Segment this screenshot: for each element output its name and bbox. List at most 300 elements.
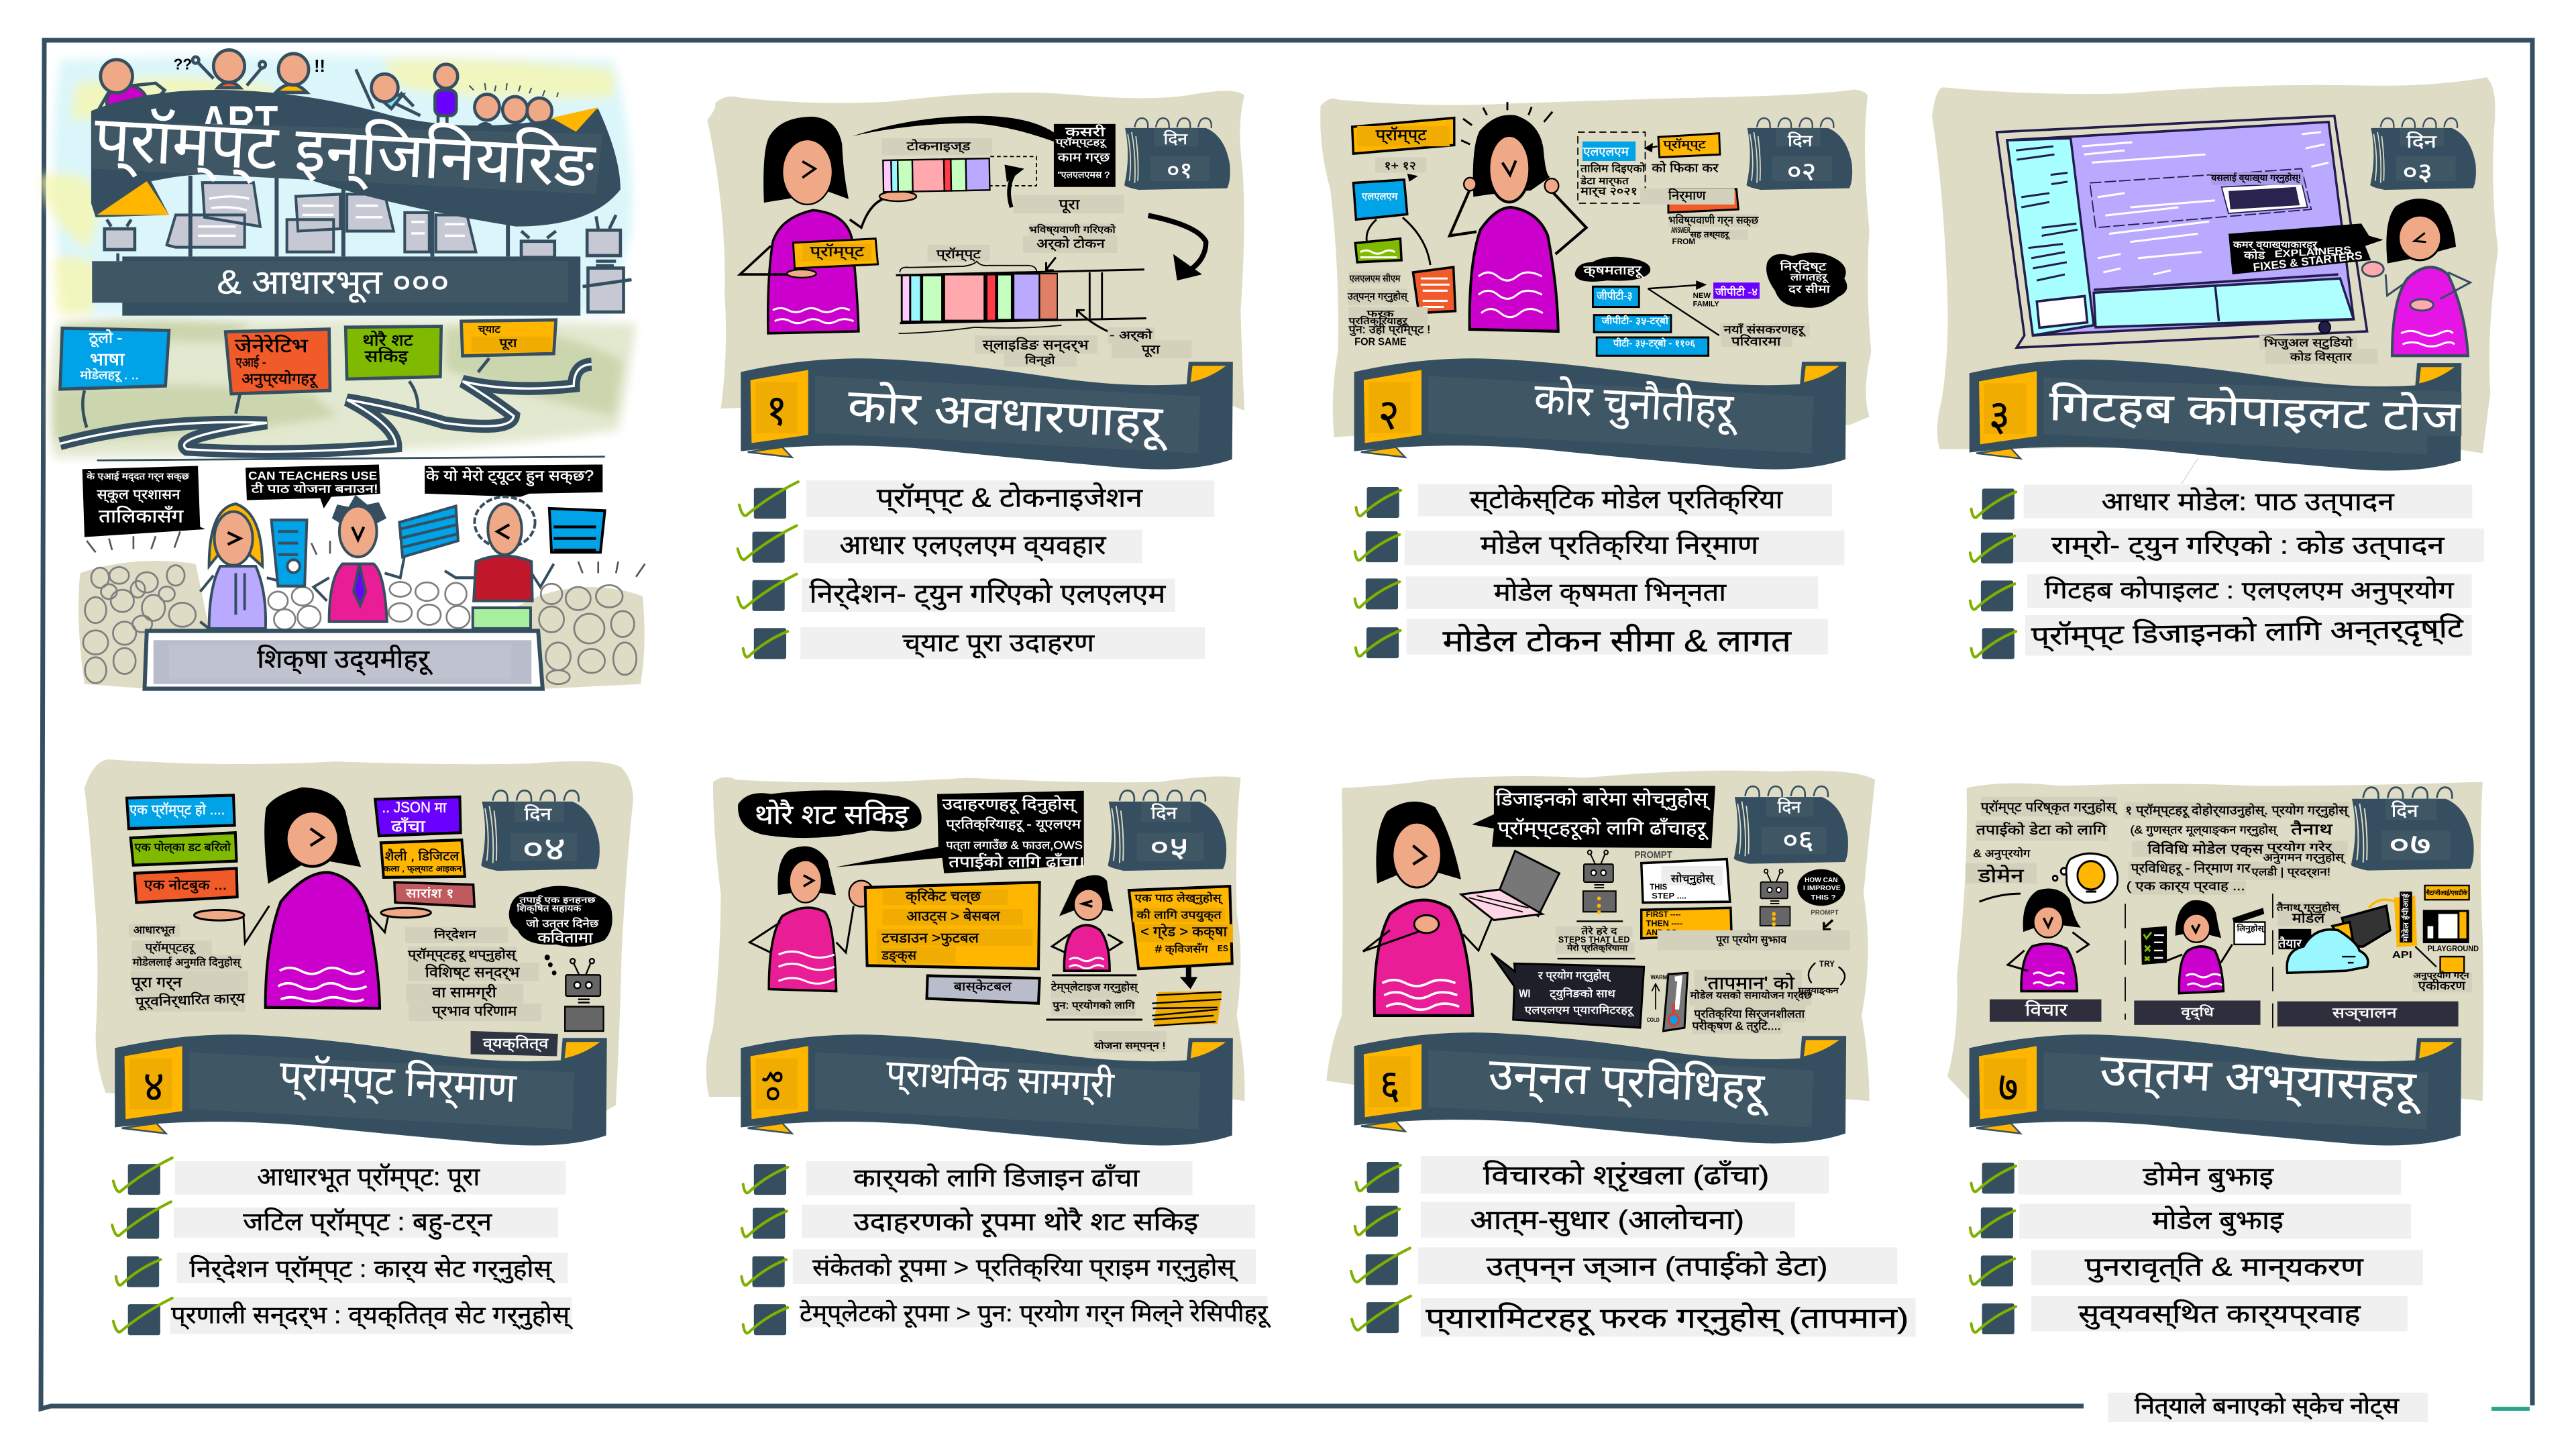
- calendar day 02: दिन: [1788, 131, 1813, 150]
- colored prompt chips right: [375, 797, 474, 906]
- integrate note: अनुप्रयोग गर्न: [2413, 971, 2469, 980]
- persona label: व्यक्तित्व: [483, 1035, 549, 1053]
- model API: [2392, 885, 2469, 961]
- speech: tune parameters: WI: [1519, 987, 1530, 1000]
- checklist row: [1355, 529, 1844, 565]
- checklist row: [1971, 1296, 2408, 1334]
- integrate note: एकीकरण: [2418, 979, 2466, 993]
- VS code label: [2259, 335, 2378, 364]
- stage bars: सञ्चालन: [2332, 1004, 2398, 1022]
- section number: ४: [143, 1063, 164, 1111]
- person thinking: [1450, 102, 1587, 331]
- thermometer: [1647, 973, 1688, 1031]
- persona label: [471, 1031, 558, 1056]
- checklist row: गिटहब कोपाइलट : एलएलएम अनुप्रयोग: [2045, 576, 2455, 604]
- person building: [2167, 902, 2233, 994]
- checklist row: च्याट पूरा उदाहरण: [902, 629, 1095, 658]
- teacher: lilac: [200, 504, 307, 629]
- prompt think step: FIRST ----: [1646, 910, 1680, 919]
- deploy note: [2277, 902, 2341, 951]
- speech: code explanations: EXPLAINERS: [2274, 245, 2352, 260]
- generate note: ANSWER: [1671, 225, 1690, 235]
- sign: generative AI: [225, 329, 330, 394]
- prompt think step: PROMPT: [1634, 849, 1672, 861]
- checklist row: [1970, 1250, 2423, 1286]
- sign: generative AI: एआई -: [235, 355, 266, 370]
- speech: teachers: टी पाठ योजना बनाउन!: [252, 482, 378, 496]
- robot with cloud: THIS ?: [1811, 894, 1836, 902]
- section number: १०: [756, 1069, 790, 1102]
- sign: generative AI: जेनेरेटिभ: [235, 335, 309, 357]
- cost cloud: निर्दिष्ट: [1780, 260, 1827, 274]
- crowd characters on banner: [98, 50, 558, 131]
- example sports box: क्रिकेट चल्छ: [906, 888, 981, 905]
- answer box: बास्केटबल: [954, 979, 1012, 994]
- checklist row: [738, 574, 1175, 612]
- refine note: तपाईंको डेटा को लागि: [1976, 822, 2107, 838]
- clapboard: लिनुहोस्: [2237, 924, 2265, 933]
- model family: [1593, 280, 1810, 356]
- basic prompts note: प्रॉम्प्टहरू: [146, 941, 197, 955]
- section number: ७: [1998, 1065, 2018, 1110]
- token strip large: [896, 258, 1146, 333]
- tokenized label: टोकनाइज्ड: [907, 140, 971, 154]
- template box: [1129, 886, 1233, 969]
- speech: code explanations: कमर व्याख्याकारहरू: [2233, 239, 2318, 252]
- refine note: [1966, 797, 2118, 902]
- stochastic note: प्रतिक्रियाहरू: [1349, 316, 1409, 327]
- road with sign posts: [60, 358, 592, 451]
- checklist row: प्यारामिटरहरू फरक गर्नुहोस् (तापमान): [1426, 1302, 1909, 1336]
- sign: large language models: [60, 328, 169, 389]
- workflow note: ( एक कार्य प्रवाह ...: [2127, 879, 2245, 894]
- thermometer: WARM: [1651, 974, 1667, 980]
- section title: कोर चुनौतीहरू: [1533, 375, 1740, 435]
- checklist row: आधारभूत प्रॉम्प्ट: पूरा: [257, 1163, 480, 1192]
- subtitle banner: & आधारभूत ०००: [217, 264, 449, 303]
- cost cloud: [1766, 252, 1847, 308]
- checklist row: विचारको श्रृंखला (ढाँचा): [1483, 1160, 1769, 1191]
- strip labels: विन्डो: [1025, 354, 1056, 368]
- LLM box with outputs: [1353, 180, 1456, 313]
- checklist row: आधार एलएलएम व्यवहार: [839, 531, 1107, 561]
- example sports box: [865, 882, 1040, 969]
- robot with dots: [1576, 851, 1623, 921]
- workflow note: [2125, 802, 2350, 895]
- checklist row: [739, 480, 1214, 519]
- panel: day 5 primary content: [706, 776, 1271, 1335]
- speech: tutor: के यो मेरो ट्यूटर हुन सक्छ?: [426, 466, 594, 487]
- model family: जीपीटी- ३५-टर्बो: [1602, 315, 1668, 327]
- sign: large language models: मोडेलहरू . ..: [80, 368, 139, 383]
- colored prompt chips right: कला , फ्ल्याट आइकन: [384, 863, 462, 873]
- cloud: few shot: [738, 790, 922, 838]
- banner: [741, 358, 1233, 470]
- predicted token label: भविष्यवाणी गरिएको: [1029, 224, 1116, 236]
- sign: few shot: सकिइ: [365, 347, 409, 366]
- speech: teachers: CAN TEACHERS USE: [248, 469, 378, 482]
- template box: की लागि उपयुक्त: [1136, 908, 1222, 922]
- checklist row: [1972, 484, 2472, 519]
- checklist row: [112, 1201, 558, 1240]
- equation: १+ १२: [1384, 159, 1416, 172]
- how LLMs work box: काम गर्छ: [1058, 150, 1110, 165]
- checklist row: [742, 1205, 1255, 1239]
- how LLMs work box: [1054, 124, 1116, 187]
- checklist row: [116, 1252, 568, 1287]
- lightbulb cloud: [2053, 853, 2118, 903]
- calendar day 07: दिन: [2392, 800, 2418, 821]
- colored prompt chips right: शैली , डिजिटल: [385, 848, 460, 864]
- exclamations: ??: [174, 55, 192, 72]
- section number: ३: [1989, 392, 2010, 440]
- temperature note: प्रतिक्रिया सिर्जनशीलता: [1694, 1008, 1805, 1021]
- stage bars: [1990, 1000, 2459, 1026]
- speech: school admin: के एआई मद्दत गर्न सक्छ: [87, 470, 189, 483]
- model API: मोडेल ईपीआई: [2401, 894, 2410, 942]
- IDE screen: [1996, 116, 2367, 347]
- integrate note: [2412, 971, 2472, 993]
- stochastic note: FOR SAME: [1354, 336, 1407, 348]
- attribution: [2108, 1393, 2428, 1422]
- LLM training note: तालिम दिइएको: [1580, 162, 1646, 174]
- thought cloud: शिक्षित सहायक: [517, 903, 582, 914]
- checklist row: [1356, 1156, 1829, 1193]
- stochastic note: फरक: [1366, 309, 1395, 319]
- refine note: & अनुप्रयोग: [1973, 847, 2031, 861]
- strip labels: पूरा: [1142, 343, 1160, 358]
- speech: school admin: [83, 466, 205, 537]
- thought cloud: कवितामा: [537, 929, 593, 946]
- person with laptop: [1363, 803, 1559, 1016]
- calendar day 01: ०१: [1167, 158, 1193, 182]
- calendar day 06: ०६: [1782, 825, 1814, 855]
- robot with cloud: I IMPROVE: [1803, 885, 1841, 892]
- explain selection: यसलाई व्याख्या गर्नुहोस्!: [2211, 172, 2301, 184]
- speech: examples box: पत्ता लगाउँछ & फाउल,OWS: [946, 839, 1083, 853]
- calendar day 01: [1124, 118, 1230, 190]
- cost cloud: दर सीमा: [1788, 282, 1831, 295]
- lesson plan done label: योजना सम्पन्न !: [1094, 1040, 1165, 1053]
- prompt think step: [1634, 849, 1731, 938]
- banner: [1354, 1032, 1846, 1143]
- basic prompts note: पूर्वनिर्धारित कार्य: [136, 989, 246, 1011]
- thought cloud: जो उत्तर दिनेछ: [526, 916, 598, 930]
- tokenized label: [881, 138, 992, 156]
- speech: school admin: स्कूल प्रशासन: [97, 488, 180, 503]
- robot: [565, 959, 604, 1031]
- example sports box: टचडाउन >फुटबल: [881, 930, 979, 947]
- checklist row: [1970, 1203, 2411, 1239]
- prompt think step: THEN ----: [1646, 918, 1682, 928]
- checklist row: [743, 627, 1205, 659]
- colored prompt chips left: [127, 795, 237, 902]
- banner: [115, 1034, 607, 1146]
- checklist row: कार्यको लागि डिजाइन ढाँचा: [853, 1163, 1140, 1193]
- prompt box: [1352, 118, 1454, 154]
- speech bubbles and posts: [167, 176, 508, 256]
- generate note: भविष्यवाणी गर्न सक्छ: [1668, 214, 1758, 227]
- template box: < ग्रेड > कक्षा: [1140, 923, 1228, 941]
- crowd: [78, 531, 645, 689]
- playground: PLAYGROUND: [2428, 944, 2479, 953]
- checklist row: [1355, 1201, 1795, 1238]
- calendar day 04: ०४: [522, 831, 566, 867]
- how LLMs work box: प्रॉम्प्टहरू: [1056, 137, 1107, 148]
- thought cloud: [509, 886, 612, 975]
- stage bars: वृद्धि: [2181, 1005, 2214, 1020]
- colored prompt chips right: .. JSON मा: [382, 799, 447, 816]
- calendar day 06: [1734, 786, 1848, 864]
- speech: think about design: [1472, 786, 1715, 848]
- strip labels: [975, 327, 1191, 368]
- generate note: सह तथ्यहरू: [1690, 229, 1730, 239]
- colored prompt chips right: सारांश १: [406, 887, 454, 901]
- speech: teachers: [246, 464, 380, 508]
- speech: tune parameters: [1491, 953, 1644, 1028]
- strip labels: - अर्को: [1110, 328, 1152, 342]
- calendar day 04: दिन: [525, 804, 552, 824]
- sign: chat completion: [462, 320, 556, 356]
- checklist row: राम्रो- ट्युन गरिएको : कोड उत्पादन: [2051, 531, 2445, 561]
- checklist row: प्रॉम्प्ट डिजाइनको लागि अन्तर्दृष्टि: [2031, 613, 2465, 653]
- capabilities cloud: क्षमताहरू: [1584, 264, 1644, 278]
- suggestion note: [1658, 930, 1850, 951]
- panel: day 1 core concepts: [707, 91, 1244, 659]
- how LLMs work box: "एलएलएमस ?: [1058, 170, 1110, 180]
- prompt think step: THIS: [1650, 882, 1667, 892]
- section title: उत्तम अभ्यासहरू: [2099, 1044, 2424, 1115]
- panel: day 4 prompt creation: [85, 759, 633, 1335]
- title banner: ART: [200, 97, 278, 146]
- panel: title and education entrepreneurs: [40, 50, 645, 689]
- prompt think step: STEP ....: [1652, 891, 1686, 900]
- checklist row: प्रणाली सन्दर्भ : व्यक्तित्व सेट गर्नुहोस्: [171, 1301, 573, 1330]
- speech: school admin: तालिकासँग: [99, 505, 184, 527]
- steps note: [1556, 926, 1635, 959]
- checklist row: टेम्प्लेटको रूपमा > पुन: प्रयोग गर्न मिल्ने रेसिपीहरू: [800, 1300, 1271, 1328]
- exclamations: [174, 55, 325, 76]
- prompt think step: सोच्नुहोस्: [1671, 873, 1716, 885]
- LLM training note: डेटा मार्फत: [1580, 174, 1629, 188]
- LLM training note: [1578, 132, 1646, 203]
- section number: ६: [1380, 1063, 1400, 1108]
- person with prompt: [740, 118, 916, 333]
- calendar day 02: [1746, 118, 1852, 190]
- checklist row: जटिल प्रॉम्प्ट : बहु-टर्न: [243, 1208, 492, 1240]
- calendar day 02: ०२: [1787, 158, 1816, 186]
- temperature note: 'तापमान' को: [1704, 973, 1795, 994]
- templatize note: पुन: प्रयोगको लागि: [1053, 1000, 1136, 1012]
- basic prompts note: मोडेललाई अनुमति दिनुहोस्: [133, 956, 242, 969]
- title banner: [91, 90, 621, 227]
- temperature note: मोडेल यसको समायोजन गर्दछ: [1690, 989, 1813, 1002]
- lesson plan done label: [1093, 1031, 1167, 1053]
- strip labels: स्लाइडिङ सन्दर्भ: [983, 337, 1089, 354]
- sign: chat completion: च्याट: [478, 325, 500, 336]
- speech: tune parameters: र प्रयोग गर्नुहोस्: [1538, 969, 1611, 982]
- checklist row: [743, 1296, 1271, 1335]
- model family: जीपीटी-३: [1597, 289, 1633, 303]
- workflow note: अनुगमन गर्नुहोस्: [2263, 851, 2347, 865]
- checklist row: स्टोकेस्टिक मोडेल प्रतिक्रिया: [1470, 484, 1784, 515]
- section title: गिटहब कोपाइलट टोज: [2049, 382, 2461, 441]
- section number: १: [766, 387, 787, 435]
- prompt box: प्रॉम्प्ट: [1376, 127, 1427, 144]
- section title: कोर अवधारणाहरू: [847, 380, 1170, 451]
- example sports box: डङ्क्स: [881, 949, 917, 963]
- chip text: एक प्रॉम्प्ट हो ....: [129, 801, 225, 818]
- templatize note: टेम्प्लेटाइज गर्नुहोस्: [1051, 981, 1139, 994]
- checklist row: [738, 526, 1142, 563]
- speech: examples box: तपाईंको लागि ढाँचा।: [949, 853, 1085, 871]
- cost cloud: लागतहरू: [1790, 272, 1829, 284]
- sign: large language models: भाषा: [90, 350, 125, 369]
- arrows: [853, 116, 1206, 280]
- cloud: few shot: थोरै शट सकिइ: [755, 800, 910, 830]
- instruction prompts note: [405, 927, 541, 1021]
- stochastic note: [1348, 272, 1430, 348]
- checklist row: उदाहरणको रूपमा थोरै शट सकिइ: [853, 1208, 1199, 1237]
- deploy note: मोडेल: [2292, 910, 2325, 926]
- robots: [105, 215, 631, 312]
- model API: API: [2392, 950, 2412, 961]
- temperature note: [1689, 969, 1839, 1034]
- section title: उन्नत प्रविधिहरू: [1487, 1049, 1772, 1117]
- prompt label: प्रॉम्प्ट: [936, 247, 981, 262]
- instruction prompts note: विशिष्ट सन्दर्भ: [425, 964, 521, 981]
- sign: few shot: [345, 326, 441, 379]
- LLM box with outputs: एलएलएम: [1362, 191, 1398, 203]
- clipboard: [2141, 926, 2167, 965]
- robot with cloud: [1760, 869, 1845, 929]
- checklist row: मोडेल प्रतिक्रिया निर्माण: [1481, 529, 1759, 561]
- refine note: प्रॉम्प्ट परिष्कृत गर्नुहोस्: [1981, 800, 2118, 816]
- speech: tutor: [425, 464, 602, 497]
- checklist row: मोडेल टोकन सीमा & लागत: [1443, 623, 1792, 658]
- banner: [741, 1034, 1233, 1146]
- steps note: मेरो प्रतिक्रियामा: [1567, 943, 1628, 953]
- speech: tune parameters: एलएलएम प्यारामिटरहरू: [1525, 1004, 1635, 1017]
- model family: परिवारमा: [1731, 335, 1781, 348]
- calendar day 03: [2370, 118, 2476, 190]
- speech: examples box: प्रतिक्रियाहरू - यूएलएम: [946, 817, 1081, 833]
- person ideating: [2008, 890, 2089, 991]
- teacher: pink with books: [313, 497, 458, 622]
- example sports box: आउट्स > बेसबल: [906, 908, 1000, 925]
- calendar day 01: दिन: [1164, 131, 1188, 148]
- checklist row: उत्पन्न ज्ञान (तपाईंको डेटा): [1486, 1252, 1828, 1283]
- small person: [1052, 876, 1122, 971]
- section number: २: [1379, 391, 1399, 439]
- checklist row: मोडेल क्षमता भिन्नता: [1494, 578, 1727, 608]
- speech: think about design: प्रॉम्प्टहरूको लागि ढाँचाहरू: [1498, 818, 1709, 840]
- sign: few shot: थोरै शट: [362, 331, 413, 350]
- code lines: [2082, 132, 2328, 274]
- speech: examples box: उदाहरणहरू दिनुहोस्: [942, 796, 1077, 814]
- prompt chip: [1644, 133, 1720, 174]
- try loop: [1809, 959, 1845, 985]
- chip text: एक नोटबुक ...: [144, 877, 227, 894]
- speech: think about design: डिजाइनको बारेमा सोच्नुहोस्: [1496, 788, 1711, 811]
- checklist row: [113, 1297, 573, 1335]
- template box: एक पाठ लेख्नुहोस्: [1134, 892, 1224, 905]
- prompt label: प्रॉम्प्ट: [810, 243, 864, 260]
- sign: education entrepreneurs: शिक्षा उद्यमीहरू: [257, 644, 433, 676]
- calendar day 07: [2351, 788, 2474, 871]
- workflow note: प्रयोग गरेर: [2267, 841, 2332, 855]
- instruction prompts note: प्रॉम्प्टहरू थप्नुहोस्: [408, 948, 518, 963]
- workflow note: प्रविधिहरू - निर्माण गर: [2131, 861, 2251, 877]
- model family: FAMILY: [1693, 300, 1719, 308]
- speech: examples box: [835, 791, 1085, 873]
- sign: large language models: ठूलो -: [89, 329, 122, 347]
- checklist row: [1355, 576, 1818, 609]
- explain selection: [2090, 169, 2311, 227]
- background: [707, 91, 1244, 411]
- checklist row: [1352, 1296, 1915, 1337]
- calendar day 04: [481, 790, 600, 871]
- completion label: [1014, 195, 1124, 213]
- deploy note: तैनाथ गर्नुहोस्: [2277, 902, 2341, 914]
- panel: day 6 advanced techniques: [1326, 771, 1915, 1337]
- checklist row: [1356, 619, 1828, 658]
- instruction prompts note: वा सामग्री: [432, 984, 497, 1002]
- steps note: तेरे हरे द: [1581, 926, 1618, 936]
- checklist row: [1970, 529, 2484, 564]
- checklist row: [1351, 1247, 1897, 1285]
- template box: # क्विजसँग: [1155, 943, 1208, 956]
- cloud and servers: [2287, 900, 2396, 973]
- checklist row: [1356, 484, 1832, 518]
- model family: जीपीटी -४: [1715, 286, 1758, 299]
- teacher: red with calendar: [445, 497, 605, 629]
- model API: चैट/जीआई/एसडीके: [2426, 889, 2468, 897]
- calendar day 05: ०५: [1150, 832, 1189, 863]
- basic prompts note: [129, 924, 248, 1012]
- sign: chat completion: पूरा: [500, 335, 517, 351]
- panel: day 7 best practices: [1947, 782, 2483, 1334]
- thought cloud: तपाईं एक इनहनछ: [519, 895, 596, 905]
- model family: NEW: [1693, 292, 1711, 300]
- workflow note: विविधि मोडेल एक्स: [2147, 841, 2263, 858]
- generate note: निर्माण: [1668, 189, 1707, 203]
- token strip small: [883, 158, 989, 192]
- panel: day 3 github copilot: [1932, 77, 2498, 659]
- arrow and paper stack: [1152, 967, 1222, 1026]
- prompt label: [793, 239, 878, 268]
- capabilities cloud: [1574, 257, 1650, 282]
- temperature note: मूल्याङ्कन: [1798, 985, 1839, 996]
- sign: education entrepreneurs: [144, 631, 543, 689]
- playground: [2415, 910, 2479, 973]
- prompt label: [928, 245, 990, 262]
- speech: code explanations: FIXES & STARTERS: [2253, 249, 2363, 274]
- templatize note: [1046, 975, 1142, 1020]
- instruction prompts note: निर्देशन: [434, 928, 477, 942]
- calendar day 05: दिन: [1151, 803, 1178, 823]
- basic prompts note: आधारभूत: [133, 924, 175, 937]
- banner: [1354, 358, 1846, 470]
- section title: प्राथमिक सामग्री: [885, 1053, 1116, 1106]
- subtitle banner: [92, 256, 580, 316]
- attribution: नित्याले बनाएको स्केच नोट्स: [2135, 1393, 2400, 1419]
- model family: पीटी- ३५-टर्बो - ११०६: [1613, 337, 1695, 350]
- person: [194, 789, 431, 1008]
- sign: generative AI: अनुप्रयोगहरू: [241, 370, 318, 388]
- person: [749, 847, 873, 991]
- workflow note: तैनाथ: [2291, 820, 2333, 838]
